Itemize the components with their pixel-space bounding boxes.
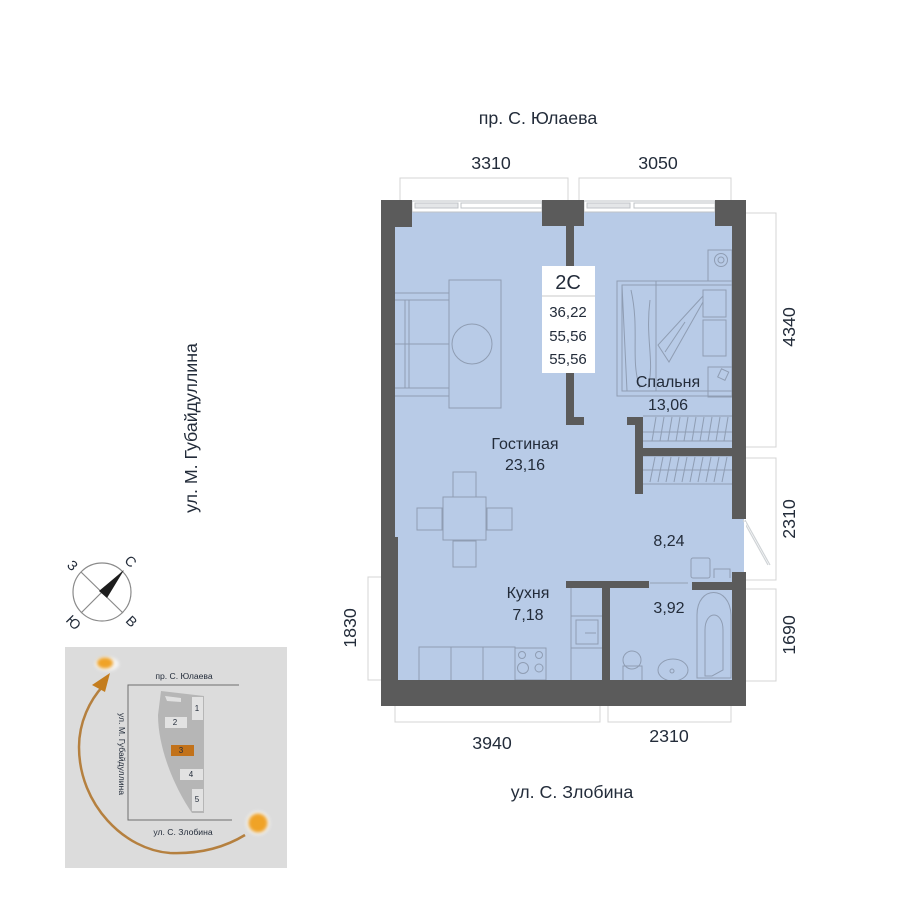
- map street: north: пр. С. Юлаева: [155, 671, 213, 681]
- building 1: [192, 697, 203, 720]
- map street lines: [128, 685, 239, 820]
- building 5: [192, 789, 203, 811]
- dimension lines: [368, 178, 776, 722]
- building 2: [165, 717, 187, 728]
- dimension: 1690: 1690: [779, 615, 799, 655]
- card title: 2С: [555, 272, 581, 294]
- room label: kitchen: Кухня: [507, 585, 549, 602]
- room label: hallway: 8,24: [653, 533, 685, 550]
- door swing: [743, 520, 770, 565]
- dimension: 4340: 4340: [779, 307, 799, 347]
- dimension: 2310 right: 2310: [779, 499, 799, 539]
- street label: north: пр. С. Юлаева: [479, 108, 597, 128]
- dimension: 3940: 3940: [472, 733, 512, 753]
- apartment floor fill: [395, 212, 732, 680]
- building 5: 5: [195, 795, 200, 804]
- room label: kitchen: 7,18: [512, 607, 544, 624]
- sun path arrow: [79, 673, 245, 853]
- compass letters: З: [64, 557, 81, 574]
- area with balcony: 55,56: [549, 351, 587, 368]
- compass needle: [99, 570, 124, 598]
- room label: kitchen: [507, 585, 549, 624]
- furniture: wardrobe hangers: [643, 416, 732, 484]
- compass letters: С: [121, 552, 140, 571]
- room label: bedroom: Спальня: [636, 374, 700, 391]
- compass letters: В: [123, 612, 141, 630]
- dimension: 3050: 3050: [638, 153, 678, 173]
- compass letters: [63, 552, 141, 633]
- room label: bedroom: [636, 374, 700, 414]
- total area: 55,56: [549, 328, 587, 345]
- building 3 highlighted: 3: [179, 746, 184, 755]
- furniture: bedroom nightstands: [708, 250, 732, 397]
- apartment card: 2C: [542, 266, 595, 373]
- icon: sunset: [246, 811, 270, 835]
- building 1: 1: [195, 704, 200, 713]
- room label: bedroom: 13,06: [648, 397, 688, 414]
- map street: west: ул. М. Губайдуллина: [117, 713, 127, 795]
- street label: west: ул. М. Губайдуллина: [181, 343, 201, 513]
- walls: [381, 200, 746, 706]
- windows: [412, 201, 715, 212]
- room label: living room: [491, 436, 559, 474]
- dimension: 1830: 1830: [340, 608, 360, 648]
- furniture: kitchen units: [419, 588, 602, 680]
- room label: living room: Гостиная: [491, 436, 559, 453]
- compass letters: Ю: [63, 612, 84, 633]
- dimension: 3310: 3310: [471, 153, 511, 173]
- furniture: bed: [617, 281, 732, 396]
- living area: 36,22: [549, 304, 587, 321]
- dimension: 2310 bottom: 2310: [649, 726, 689, 746]
- street label: south: ул. С. Злобина: [511, 782, 633, 802]
- building 4: [180, 769, 203, 780]
- building 4: 4: [189, 770, 194, 779]
- location map panel: [65, 647, 287, 868]
- site plan: [158, 691, 204, 813]
- compass: [63, 552, 141, 633]
- building 2: 2: [173, 718, 178, 727]
- furniture: sofa and coffee table: [395, 280, 501, 408]
- room label: bathroom: 3,92: [653, 600, 685, 617]
- icon: sunrise: [95, 657, 119, 671]
- building 3 highlighted: [171, 745, 194, 756]
- furniture: dining table: [417, 472, 512, 567]
- room label: living room: 23,16: [505, 457, 545, 474]
- furniture: bathroom fixtures: [623, 558, 731, 681]
- map street: south: ул. С. Злобина: [153, 827, 213, 837]
